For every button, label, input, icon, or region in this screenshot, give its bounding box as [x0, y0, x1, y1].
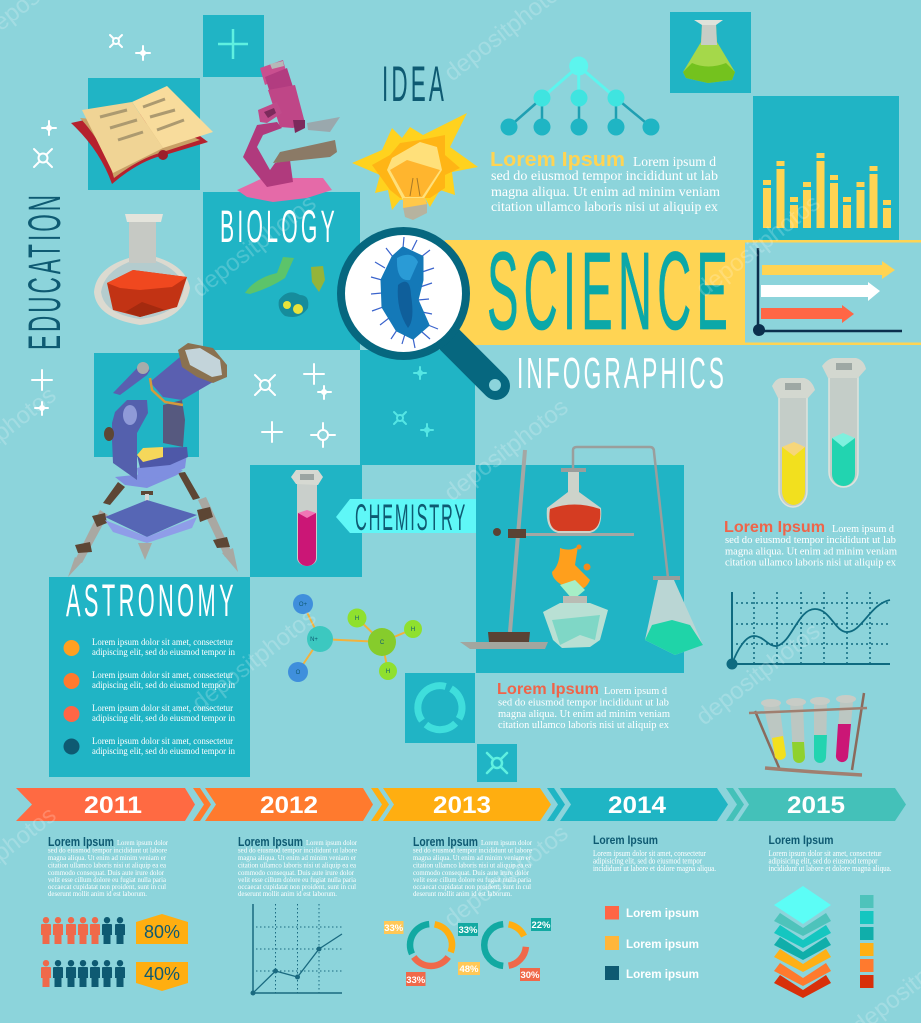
list item 1: adipiscing elit, sed do eiusmod tempor in: [92, 647, 235, 657]
tripod legs: [68, 472, 238, 577]
column 2012 text: commodo consequat. Duis aute irure dolor: [238, 868, 354, 877]
badge 80 percent: 80%: [144, 922, 180, 942]
list item 4: Lorem ipsum dolor sit amet, consectetur: [92, 736, 233, 746]
timeline 2011: [16, 788, 195, 821]
label 33 percent yellow: 33%: [384, 923, 404, 934]
icon: molecule: N+: [310, 637, 318, 643]
badge 80 percent: [136, 914, 188, 944]
sparkle icons: [32, 35, 335, 447]
column 2015 text: adipisicing elit, sed do eiusmod tempor: [768, 856, 878, 866]
timeline chevron: [726, 788, 744, 821]
list item 2: [64, 670, 235, 690]
column 2011 text: commodo consequat. Duis aute irure dolor: [48, 868, 164, 877]
chart: horizontal arrows: [753, 248, 902, 336]
heading: education: EDUCATION: [19, 192, 70, 350]
timeline 2014: [560, 788, 728, 821]
column 2013 text: citation ullamco laboris nisi ut aliquip ea ea: [413, 860, 532, 870]
timeline 2013: 2013: [433, 792, 491, 819]
text block: right lorem ipsum: Lorem ipsum d: [832, 524, 895, 535]
icon: idea tree diagram: [500, 56, 660, 136]
icon: bacteria cells: [245, 257, 325, 317]
column 2013 text: sed do eiusmod tempor incididunt ut labore: [413, 846, 533, 854]
column 2014 text: Lorem ipsum dolor sit amet, consectetur: [593, 849, 706, 858]
icon: microscope: [237, 60, 340, 202]
column 2011 text: magna aliqua. Ut enim ad minim veniam er: [48, 853, 166, 862]
column 2011 text: deserunt mollit anim id est laborum.: [48, 889, 147, 898]
chart: donut left: [384, 921, 480, 986]
chart: line with grid: [250, 904, 342, 996]
text block: centre lorem ipsum: [497, 681, 670, 731]
text block: right lorem ipsum: Lorem Ipsum: [724, 519, 825, 536]
list item 3: [64, 703, 235, 723]
list item 2: Lorem ipsum dolor sit amet, consectetur: [92, 670, 233, 680]
column 2011 text: velit esse cillum dolore eu fugiat nulla paria: [48, 875, 167, 884]
badge 40 percent: [136, 962, 188, 991]
chart: layer stack: [774, 886, 831, 998]
text block: centre lorem ipsum: magna aliqua. Ut enim ad minim veniam: [498, 709, 670, 720]
text block: centre lorem ipsum: Lorem Ipsum: [497, 681, 599, 698]
watermarks: depositphotos: [187, 189, 321, 303]
text block: top lorem ipsum: Lorem ipsum d: [633, 154, 716, 169]
timeline 2015: [738, 788, 906, 821]
column 2015 text: Lorem ipsum dolor sit amet, consectetur: [768, 849, 882, 858]
column 2013 text: magna aliqua. Ut enim ad minim veniam er: [413, 853, 531, 862]
text block: top lorem ipsum: [490, 148, 721, 214]
burner: [563, 596, 587, 603]
column 2015 text: [768, 833, 892, 873]
list item 3: adipiscing elit, sed do eiusmod tempor in: [92, 713, 235, 723]
icon: two test tubes: [772, 358, 866, 507]
list item 3: Lorem ipsum dolor sit amet, consectetur: [92, 703, 233, 713]
column 2013 text: deserunt mollit anim id est laborum.: [413, 889, 512, 898]
icon: cross target: [487, 753, 507, 773]
icon: molecule: C: [380, 640, 385, 646]
column 2014 text: [593, 833, 716, 873]
text block: right lorem ipsum: magna aliqua. Ut enim ad minim veniam: [725, 546, 897, 558]
text block: right lorem ipsum: citation ullamco laboris nisi ut aliquip ex: [725, 558, 897, 568]
badge 40 percent: 40%: [144, 964, 180, 984]
column 2011 text: citation ullamco laboris nisi ut aliquip ea ea: [48, 860, 167, 870]
text block: right lorem ipsum: sed do eiusmod tempor incididunt ut lab: [725, 535, 896, 546]
column 2013 text: [413, 835, 533, 898]
column 2013 text: Lorem ipsum dolor: [481, 838, 532, 847]
icon: test tube pink: [291, 470, 323, 566]
column 2013 text: Lorem Ipsum: [413, 835, 478, 849]
timeline 2012: [205, 788, 373, 821]
chart: donut right: [484, 918, 551, 981]
red flask: [547, 472, 601, 533]
chart: yellow bars: [763, 153, 891, 228]
list item 1: [64, 637, 235, 657]
text block: centre lorem ipsum: Lorem ipsum d: [604, 686, 668, 697]
icon: open book: [71, 86, 213, 184]
label 48 percent yellow: 48%: [459, 964, 479, 975]
column 2013 text: occaecat cupidatat non proident, sunt in cul: [413, 882, 531, 891]
icon: molecule: H: [411, 627, 415, 633]
icon: telescope: [68, 343, 238, 577]
column 2011 text: Lorem ipsum dolor: [117, 838, 168, 847]
text block: top lorem ipsum: magna aliqua. Ut enim ad minim veniam: [491, 184, 721, 199]
heading: infographics: INFOGRAPHICS: [517, 349, 727, 398]
timeline chevron: [371, 788, 389, 821]
text block: right lorem ipsum: [724, 519, 897, 568]
legend: Lorem ipsum: [626, 906, 699, 920]
column 2015 text: incididunt ut labore et dolore magna aliqua.: [768, 864, 892, 873]
flame: [552, 546, 590, 590]
text block: top lorem ipsum: citation ullamco laboris nisi ut aliquip ex: [491, 199, 718, 214]
label: chemistry: [336, 497, 476, 538]
column 2014 text: adipisicing elit, sed do eiusmod tempor: [593, 856, 702, 866]
text block: centre lorem ipsum: sed do eiusmod tempor incididunt ut lab: [498, 698, 669, 708]
list item 2: adipiscing elit, sed do eiusmod tempor in: [92, 680, 235, 690]
column 2015 text: Lorem Ipsum: [768, 833, 834, 847]
legend: Lorem ipsum: [626, 967, 699, 981]
column 2011 text: [48, 835, 168, 898]
legend: Lorem ipsum: [626, 937, 699, 951]
pictogram row 40 percent: [41, 960, 188, 991]
icon: cycle ring: [418, 686, 462, 730]
icon: light bulb: [352, 113, 478, 220]
tray: [141, 491, 153, 495]
icon: blue bacterium: [371, 237, 438, 348]
icon: test tube rack: [749, 693, 867, 775]
icon: molecule: [288, 594, 422, 682]
infographic canvas: ASTRONOMY: [66, 575, 237, 626]
label 22 percent: 22%: [531, 920, 551, 931]
column 2011 text: sed do eiusmod tempor incididunt ut labore: [48, 846, 168, 854]
infographic canvas: BIOLOGY: [220, 201, 338, 252]
text block: top lorem ipsum: sed do eiusmod tempor incididunt ut lab: [491, 168, 718, 183]
watermarks: depositphotos: [439, 393, 573, 507]
label 33 percent coral: 33%: [406, 975, 426, 986]
icon: chemistry apparatus: [460, 447, 703, 655]
teal block sparkles: [394, 367, 433, 436]
layer swatches: [860, 895, 874, 988]
column 2012 text: Lorem Ipsum: [238, 835, 303, 849]
timeline chevron: [193, 788, 211, 821]
text block: centre lorem ipsum: citation ullamco laboris nisi ut aliquip ex: [498, 720, 670, 731]
teal background blocks: [49, 12, 899, 782]
panel: astronomy: [64, 575, 237, 756]
column 2012 text: velit esse cillum dolore eu fugiat nulla paria: [238, 875, 357, 884]
column 2014 text: incididunt ut labore et dolore magna aliqua.: [593, 864, 716, 873]
text block: top lorem ipsum: Lorem Ipsum: [490, 148, 625, 171]
list item 4: [64, 736, 235, 756]
magnifier: [337, 227, 501, 391]
label 33 percent teal: 33%: [458, 925, 478, 936]
watermarks: depositphotos: [187, 603, 321, 717]
column 2011 text: Lorem Ipsum: [48, 835, 114, 849]
watermarks: depositphotos: [439, 819, 573, 933]
timeline 2011: 2011: [84, 792, 142, 819]
column 2012 text: deserunt mollit anim id est laborum.: [238, 889, 337, 898]
watermarks: depositphotos: [691, 617, 825, 731]
column 2012 text: sed do eiusmod tempor incididunt ut labore: [238, 846, 358, 854]
icon: molecule: H: [355, 616, 359, 622]
column 2012 text: [238, 835, 358, 898]
column 2012 text: magna aliqua. Ut enim ad minim veniam er: [238, 853, 356, 862]
watermarks: depositphotos: [691, 189, 825, 303]
list item 4: adipiscing elit, sed do eiusmod tempor in: [92, 746, 235, 756]
timeline chevron: [547, 788, 565, 821]
column 2012 text: Lorem ipsum dolor: [306, 838, 357, 847]
column 2013 text: velit esse cillum dolore eu fugiat nulla paria: [413, 875, 532, 884]
list item 1: Lorem ipsum dolor sit amet, consectetur: [92, 637, 233, 647]
timeline 2012: 2012: [260, 792, 318, 819]
column 2014 text: Lorem Ipsum: [593, 833, 658, 847]
timeline 2013: [383, 788, 551, 821]
conical flask: [653, 576, 680, 580]
column 2012 text: occaecat cupidatat non proident, sunt in cul: [238, 882, 356, 891]
column 2011 text: occaecat cupidatat non proident, sunt in cul: [48, 882, 166, 891]
tube: [113, 365, 150, 395]
column 2013 text: commodo consequat. Duis aute irure dolor: [413, 868, 529, 877]
legend: [605, 906, 699, 981]
science title band: [445, 230, 921, 353]
mount: [115, 470, 183, 488]
icon: molecule: O+: [299, 602, 308, 608]
column 2012 text: citation ullamco laboris nisi ut aliquip ea ea: [238, 860, 357, 870]
icon: round flask: [94, 214, 190, 325]
icon: molecule: H: [386, 669, 390, 675]
infographic canvas: CHEMISTRY: [355, 497, 467, 538]
icon: plus: [218, 29, 248, 59]
infographic canvas: IDEA: [382, 56, 447, 112]
timeline: [16, 788, 906, 821]
icon: molecule: O: [296, 670, 301, 676]
label 30 percent: 30%: [520, 970, 540, 981]
icon: green flask: [683, 20, 735, 83]
timeline 2015: 2015: [787, 792, 845, 819]
timeline 2014: 2014: [608, 792, 667, 819]
pictogram row 80 percent: [41, 914, 188, 944]
chart: wave line: [726, 592, 890, 670]
